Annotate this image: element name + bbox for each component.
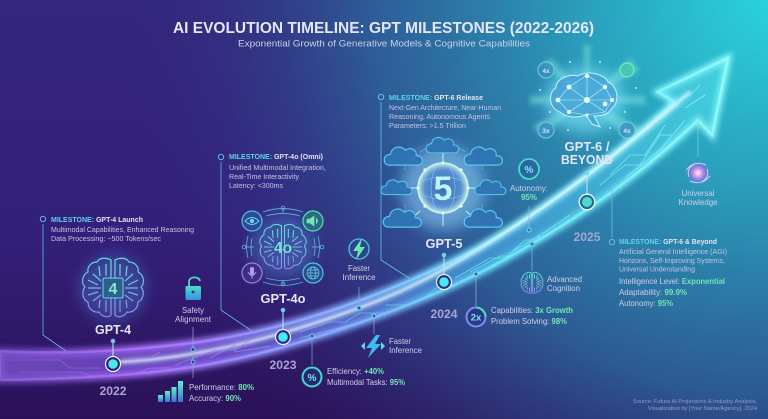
- icon: lock: [186, 277, 201, 300]
- milestone callout: GPT-4o: Latency: <300ms: [229, 181, 283, 190]
- GPT-4 section: [40, 215, 254, 403]
- milestone callout: GPT-5: Reasoning, Autonomous Agents: [389, 112, 490, 121]
- milestone callout: GPT-4o: [218, 152, 326, 331]
- icon: GPT-4 brain chip: 4: [109, 281, 118, 298]
- advanced cognition: Cognition: [547, 284, 580, 293]
- milestone callout: GPT-6 and beyond: Adaptability: 99.9%: [619, 288, 687, 297]
- label: GPT-5: GPT-5: [426, 237, 463, 251]
- icon: GPT-4 brain chip: [79, 254, 147, 322]
- milestone callout: GPT-4o: Unified Multimodal Integration,: [229, 163, 326, 172]
- performance stats: Performance: 80%: [189, 383, 254, 392]
- universal knowledge: Knowledge: [678, 198, 718, 207]
- universal knowledge: Universal: [682, 189, 715, 198]
- year 2022: 2022: [100, 384, 127, 398]
- timeline node 2023: [276, 308, 290, 344]
- milestone callout: GPT-4o: MILESTONE: GPT-4o (Omni): [229, 152, 323, 161]
- milestone callout: GPT-4: Multimodal Capabilities, Enhanced Reasoning: [51, 225, 194, 234]
- label: GPT-6 / Beyond: BEYOND: [561, 153, 613, 167]
- icon: lightning arrows: [361, 335, 385, 358]
- icon: galaxy: [685, 160, 711, 186]
- faster inference upper: Inference: [342, 273, 376, 282]
- label: GPT-4o: GPT-4o: [260, 292, 306, 306]
- milestone callout: GPT-6 and beyond: Horizons, Self-Improving Systems,: [619, 256, 725, 265]
- milestone callout: GPT-5: MILESTONE: GPT-6 Release: [389, 93, 483, 102]
- performance stats: Accuracy: 90%: [189, 394, 241, 403]
- advanced cognition: [521, 242, 582, 293]
- milestone callout: GPT-5: Next-Gen Architecture, Near-Human: [389, 103, 501, 112]
- icon: GPT-5 orb and clouds: [381, 137, 506, 230]
- safety alignment: Alignment: [175, 315, 212, 324]
- faster inference upper: Faster: [348, 264, 370, 273]
- icon: GPT-6 neural brain: 4x: [623, 128, 631, 135]
- efficiency stats: Efficiency: +40%: [327, 367, 384, 376]
- faster inference lower: Faster: [389, 337, 411, 346]
- title: AI EVOLUTION TIMELINE: GPT MILESTONES (2022-2026): [173, 20, 594, 37]
- milestone callout: GPT-6 and beyond: Intelligence Level: Exponential: [619, 277, 725, 286]
- icon: GPT-4o brain hub: 4o: [274, 240, 292, 257]
- advanced cognition: Advanced: [547, 275, 582, 284]
- milestone callout: GPT-4o: Real-Time Interactivity: [229, 172, 299, 181]
- autonomy stat: [510, 159, 548, 232]
- label: GPT-6 / Beyond: [561, 140, 613, 167]
- efficiency stats: Multimodal Tasks: 95%: [327, 378, 405, 387]
- faster inference lower: Inference: [389, 346, 423, 355]
- milestone callout: GPT-6 and beyond: Autonomy: 95%: [619, 299, 673, 308]
- milestone callout: GPT-5: Parameters: >1.5 Trillion: [389, 121, 466, 130]
- icon: GPT-4o brain hub: [242, 206, 324, 286]
- icon: small brain: [521, 272, 543, 293]
- icon: GPT-6 neural brain: 3x: [542, 128, 550, 135]
- icon: GPT-5 orb and clouds: 5: [434, 170, 452, 208]
- timeline node 2024: [436, 253, 452, 290]
- GPT-5 section: [378, 93, 582, 326]
- icon: GPT-6 neural brain: [530, 45, 645, 142]
- performance stats: [158, 381, 254, 403]
- icon: percent ring: %: [525, 165, 534, 176]
- universal knowledge: [678, 120, 718, 207]
- milestone callout: GPT-4: [40, 215, 194, 351]
- milestone callout: GPT-5: [378, 93, 501, 280]
- milestone callout: GPT-6 and beyond: Universal Understanding: [619, 264, 695, 274]
- autonomy stat: 95%: [521, 193, 537, 202]
- source note: [633, 399, 757, 412]
- milestone callout: GPT-6 and beyond: [609, 188, 727, 308]
- GPT-4o section: [218, 152, 423, 387]
- year 2023: 2023: [270, 358, 297, 372]
- year 2024: 2024: [430, 307, 458, 321]
- label: GPT-4: GPT-4: [95, 323, 131, 337]
- capabilities stats: Capabilities: 3x Growth: [491, 306, 573, 315]
- faster inference lower: [361, 314, 423, 358]
- source note: Visualization by [Your Name/Agency], 2024: [648, 406, 757, 412]
- subtitle: Exponential Growth of Generative Models & Cognitive Capabilities: [238, 38, 530, 50]
- icon: GPT-6 neural brain: 4x: [542, 68, 550, 75]
- milestone callout: GPT-4: Data Processing: ~500 Tokens/sec: [51, 234, 161, 243]
- efficiency stats: [302, 334, 405, 387]
- safety alignment: [175, 277, 212, 378]
- icon: bar chart: [158, 381, 183, 402]
- milestone callout: GPT-4: MILESTONE: GPT-4 Launch: [51, 215, 143, 224]
- growth arrow ribbon: [0, 58, 728, 380]
- icon: percent ring: %: [308, 373, 317, 384]
- circuit traces: [5, 85, 705, 376]
- icon: 2x ring: 2x: [471, 312, 482, 324]
- autonomy stat: Autonomy:: [510, 184, 548, 193]
- icon: lightning: [349, 238, 369, 260]
- timeline node 2022: [106, 339, 120, 372]
- timeline node 2025: [579, 171, 595, 210]
- GPT-6 section: [530, 45, 727, 308]
- label: GPT-6 / Beyond: GPT-6 /: [564, 140, 610, 154]
- capabilities stats: Problem Solving: 98%: [491, 317, 567, 326]
- year 2025: 2025: [574, 230, 601, 244]
- milestone callout: GPT-6 and beyond: Artificial General Intelligence (AGI): [619, 247, 727, 256]
- source note: Source: Future AI Projections & Industry Analysis.: [633, 399, 757, 405]
- milestone callout: GPT-6 and beyond: MILESTONE: GPT-6 & Beyond: [619, 237, 717, 246]
- capabilities stats: [466, 272, 573, 326]
- safety alignment: Safety: [182, 306, 204, 315]
- faster inference upper: [342, 238, 376, 310]
